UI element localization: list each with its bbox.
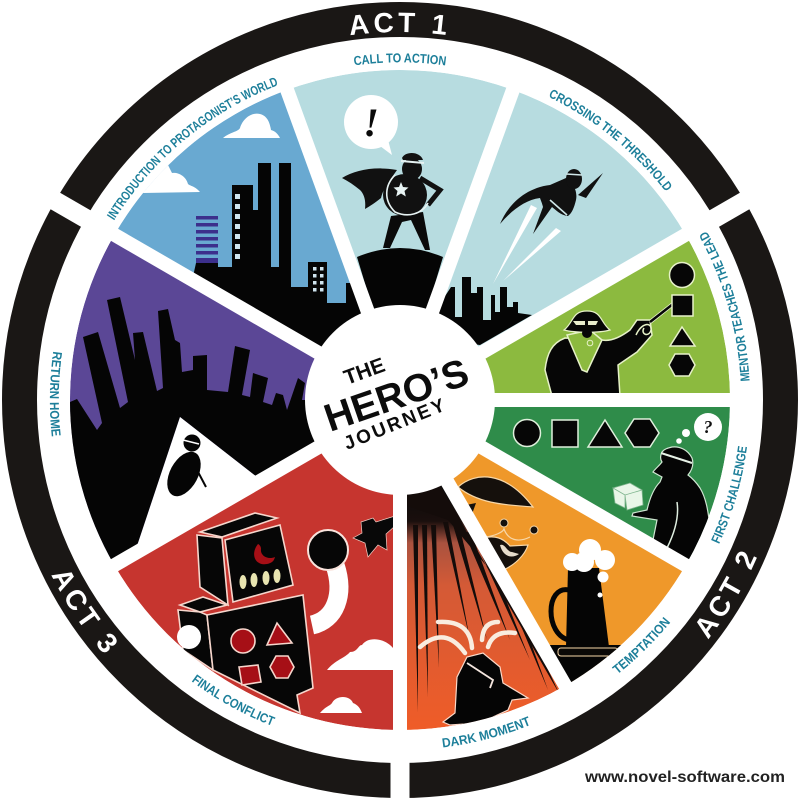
icon: white path notch (138, 417, 256, 544)
panel: final conflict (118, 454, 393, 730)
labels: stage names: MENTOR TEACHES THE LEAD (700, 232, 750, 381)
hub: title: HERO’S (319, 351, 474, 441)
icon: robot hand (177, 625, 201, 649)
labels: stage names: CALL TO ACTION (354, 53, 446, 66)
icon: mentor figure (545, 304, 673, 396)
icon: shapes (669, 262, 695, 376)
icon: hill (357, 248, 443, 310)
icon: robot arm with ball (308, 530, 348, 625)
label: act 3: ACT 3 (51, 572, 117, 652)
panel: dark moment (407, 486, 559, 730)
icon: puzzled hero with cube (613, 447, 710, 562)
panel: return home (70, 240, 314, 560)
icon: speech bubble: ! (363, 100, 379, 145)
panel: mentor teaches the lead (486, 240, 730, 393)
icon: returning hero (167, 434, 207, 496)
icon: shapes row (514, 419, 659, 447)
hub: title: THE (341, 354, 388, 390)
label: act 1: ACT 1 (350, 12, 446, 36)
icon: superhero standing (342, 153, 440, 250)
labels: stage names: DARK MOMENT (442, 716, 529, 748)
labels: stage names: INTRODUCTION TO PROTAGONIST’S WORLD (106, 78, 277, 220)
labels: stage names (50, 53, 750, 748)
separators (101, 76, 745, 745)
panel: temptation (454, 454, 682, 682)
hub: title (305, 305, 495, 495)
icon: dark skyline mountain (70, 297, 314, 560)
labels: stage names: RETURN HOME (50, 352, 62, 436)
icon: dark rays (405, 485, 560, 712)
icon: mourning hero (420, 622, 528, 725)
icon: speech bubble (344, 95, 398, 155)
panel: introduction to protagonist's world (118, 92, 361, 346)
icon: thought bubble: ? (704, 417, 712, 437)
icon: flying hero (500, 169, 603, 234)
icon: temptress face (458, 477, 538, 570)
labels: stage names: FINAL CONFLICT (192, 674, 276, 725)
icon: robot (178, 513, 313, 713)
icon: clouds (320, 639, 395, 713)
panel: first challenge (486, 407, 730, 560)
labels: stage names: TEMPTATION (612, 617, 670, 673)
icon: thought bubble (676, 413, 722, 444)
labels: stage names: CROSSING THE THRESHOLD (550, 90, 672, 190)
website url: www.novel-software.com (584, 769, 785, 786)
icon: small skyline (438, 277, 532, 345)
icon: beer tankard (548, 539, 621, 682)
panel: call to action (294, 70, 506, 309)
labels: stage names: FIRST CHALLENGE (711, 446, 747, 544)
hub: title: JOURNEY (341, 394, 450, 455)
icon: explosion (353, 516, 395, 557)
panel: crossing the threshold (439, 92, 682, 346)
label: act 2: ACT 2 (697, 552, 757, 640)
